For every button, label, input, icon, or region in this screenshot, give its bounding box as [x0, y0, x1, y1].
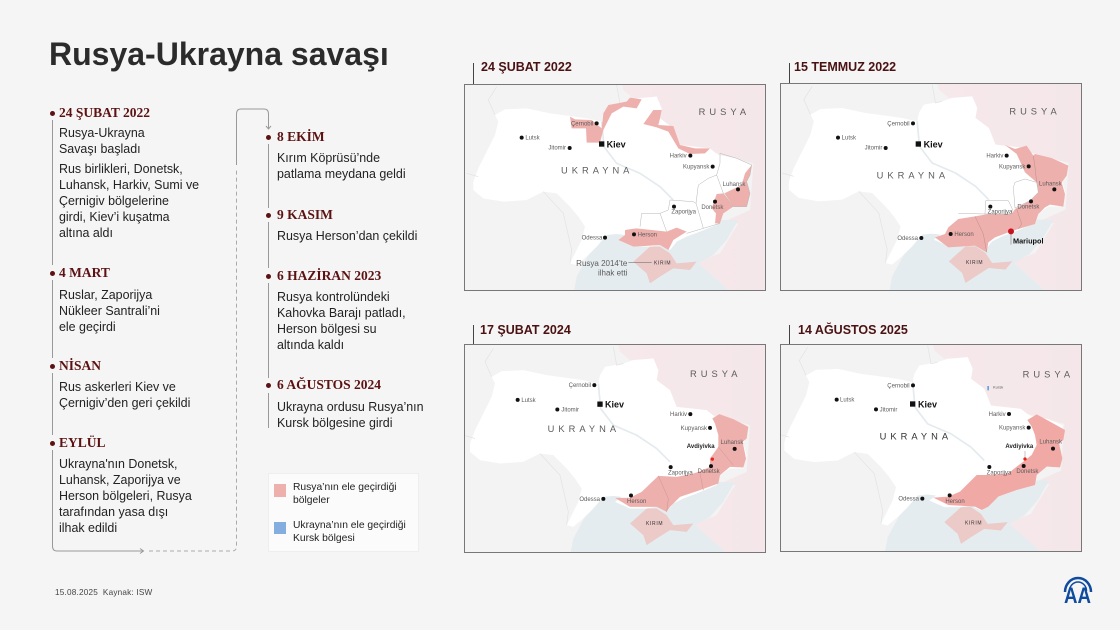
- city labels: Zaporijya: [987, 470, 1012, 476]
- city labels: Zaporijya: [671, 210, 697, 216]
- city labels: RUSYA: [690, 369, 741, 379]
- title: Rusya-Ukrayna savaşı: [49, 36, 389, 72]
- map: 24 Şubat 2022: [465, 85, 765, 290]
- city labels: Odessa: [582, 236, 603, 242]
- city labels: UKRAYNA: [548, 424, 620, 434]
- event: Eylül: EYLÜL: [59, 435, 106, 450]
- event: 6 Haziran 2023: altında kaldı: [277, 338, 344, 352]
- event: 24 Şubat 2022: Rusya-Ukrayna: [59, 126, 145, 140]
- event: Eylül: Ukrayna'nın Donetsk,: [59, 457, 178, 471]
- city labels: Avdiyivka: [1005, 444, 1034, 450]
- city labels: UKRAYNA: [561, 166, 633, 176]
- event: 9 Kasım: [266, 207, 417, 243]
- event: 4 Mart: ele geçirdi: [59, 320, 116, 334]
- city labels: Jitomir: [548, 146, 566, 152]
- event: 24 Şubat 2022: girdi, Kiev’i kuşatma: [59, 210, 170, 224]
- city labels: RUSYA: [699, 107, 750, 117]
- event: 4 Mart: Nükleer Santrali’ni: [59, 304, 160, 318]
- city labels: [835, 369, 1074, 526]
- city labels: Mariupol: [1013, 237, 1044, 246]
- city labels: Kiev: [924, 139, 943, 149]
- city labels: Luhansk: [1039, 440, 1063, 446]
- map: 17 Şubat 2024: [465, 345, 765, 552]
- event: 24 Şubat 2022: altına aldı: [59, 226, 113, 240]
- event: 8 Ekim: [266, 129, 406, 181]
- legend text: Russia: [293, 482, 397, 506]
- legend text: Ukraine: Ukrayna’nın ele geçirdiği: [293, 520, 406, 531]
- Ukrainian-held Kursk mark: [987, 386, 989, 390]
- legend text: Ukraine: [293, 520, 406, 544]
- event: Eylül: [50, 435, 192, 535]
- city labels: Kupyansk: [999, 164, 1026, 170]
- event: 6 Haziran 2023: 6 HAZİRAN 2023: [277, 268, 381, 283]
- event: Nisan: Çernigiv’den geri çekildi: [59, 396, 190, 410]
- Russian-held territory: [615, 414, 748, 512]
- map title: 24 Şubat 2022: 24 ŞUBAT 2022: [481, 60, 572, 74]
- city labels: [836, 107, 1063, 266]
- city labels: Zaporijya: [668, 471, 693, 477]
- city labels: Avdiyivka: [687, 444, 715, 450]
- city labels: Luhansk: [1039, 182, 1063, 188]
- city labels: Luhansk: [721, 440, 744, 446]
- city labels: Donetsk: [698, 469, 721, 475]
- city labels: Lutsk: [521, 398, 537, 404]
- event: Nisan: NİSAN: [59, 358, 101, 373]
- event: 8 Ekim: patlama meydana geldi: [277, 167, 406, 181]
- city labels: Kiev: [918, 399, 937, 409]
- city labels: Kupyansk: [681, 426, 708, 432]
- city labels: KIRIM: [965, 520, 982, 526]
- event: 24 Şubat 2022: Savaşı başladı: [59, 142, 141, 156]
- city labels: Kupyansk: [999, 426, 1026, 432]
- city labels: UKRAYNA: [877, 171, 949, 181]
- event: 6 Ağustos 2024: Ukrayna ordusu Rusya’nın: [277, 400, 424, 414]
- event: 8 Ekim: Kırım Köprüsü’nde: [277, 151, 380, 165]
- city labels: RUSYA: [1009, 107, 1061, 117]
- city labels: Donetsk: [1016, 469, 1039, 475]
- city labels: Jitomir: [865, 146, 882, 152]
- event: 24 Şubat 2022: 24 ŞUBAT 2022: [59, 105, 150, 120]
- city labels: Çernobil: [571, 121, 593, 127]
- city labels: Zaporijya: [988, 210, 1013, 216]
- city labels: Odessa: [898, 497, 920, 503]
- city labels: KIRIM: [966, 260, 983, 266]
- city labels: Çernobil: [569, 383, 591, 389]
- city labels: KIRIM: [654, 260, 671, 266]
- city labels: Kursk: [993, 385, 1003, 390]
- event: 24 Şubat 2022: Rus birlikleri, Donetsk,: [59, 162, 183, 176]
- event: 6 Ağustos 2024: 6 AĞUSTOS 2024: [277, 377, 381, 392]
- city labels: Lutsk: [842, 136, 857, 142]
- city labels: Kiev: [607, 139, 626, 149]
- legend text: Ukraine: Kursk bölgesi: [293, 533, 355, 544]
- legend: [268, 473, 419, 552]
- city labels: Lutsk: [525, 136, 541, 142]
- event: Eylül: tarafından yasa dışı: [59, 505, 168, 519]
- timeline connector: [52, 108, 272, 554]
- event: Eylül: ilhak edildi: [59, 521, 117, 535]
- event: Nisan: Rus askerleri Kiev ve: [59, 380, 176, 394]
- Russian-held territory: [570, 98, 752, 250]
- city labels: Donetsk: [701, 205, 724, 211]
- event: 24 Şubat 2022: Luhansk, Harkiv, Sumi ve: [59, 178, 199, 192]
- Russian-held territory: [935, 145, 1068, 252]
- city labels: Herson: [954, 232, 974, 238]
- event: Eylül: Herson bölgeleri, Rusya: [59, 489, 192, 503]
- event: 24 Şubat 2022: Çernigiv bölgelerine: [59, 194, 169, 208]
- city labels: Odessa: [579, 497, 601, 503]
- event: 9 Kasım: 9 KASIM: [277, 207, 333, 222]
- event: 4 Mart: Ruslar, Zaporijya: [59, 288, 152, 302]
- city labels: Harkiv: [670, 154, 687, 160]
- map: 15 Temmuz 2022: [781, 84, 1081, 290]
- map title: 17 Şubat 2024: 17 ŞUBAT 2024: [480, 323, 571, 337]
- city labels: Harkiv: [670, 412, 687, 418]
- city labels: Odessa: [897, 236, 919, 242]
- map: 14 Ağustos 2025: [781, 345, 1081, 551]
- city labels: Herson: [945, 499, 965, 505]
- city labels: Lutsk: [840, 398, 855, 404]
- city labels: Çernobil: [887, 121, 910, 127]
- event: 6 Haziran 2023: [266, 268, 406, 352]
- city labels: Luhansk: [723, 182, 746, 188]
- city labels: Donetsk: [1017, 205, 1040, 211]
- legend text: Russia: Rusya’nın ele geçirdiği: [293, 482, 397, 493]
- city labels: ilhak etti: [598, 269, 628, 278]
- event: 6 Haziran 2023: Herson bölgesi su: [277, 322, 377, 336]
- map title: 15 Temmuz 2022: 15 TEMMUZ 2022: [794, 60, 896, 74]
- event: Eylül: Luhansk, Zaporijya ve: [59, 473, 181, 487]
- event: 6 Ağustos 2024: Kursk bölgesine girdi: [277, 416, 392, 430]
- event: 24 Şubat 2022: [50, 105, 199, 240]
- city labels: Kiev: [605, 400, 624, 410]
- city labels: [516, 369, 744, 527]
- city labels: Herson: [638, 232, 657, 238]
- legend swatch: Ukraine: [274, 522, 286, 534]
- event: 4 Mart: 4 MART: [59, 265, 110, 280]
- city labels: Herson: [627, 499, 646, 505]
- event: 6 Ağustos 2024: [266, 377, 424, 430]
- event: 6 Haziran 2023: Kahovka Barajı patladı,: [277, 306, 406, 320]
- city labels: Rusya 2014’te: [576, 259, 628, 268]
- legend swatch: Russia: [274, 484, 286, 497]
- source line: 15.08.2025 Kaynak: ISW: [55, 588, 152, 597]
- map title: 14 Ağustos 2025: 14 AĞUSTOS 2025: [798, 323, 908, 337]
- event: 9 Kasım: Rusya Herson’dan çekildi: [277, 229, 417, 243]
- event: 8 Ekim: 8 EKİM: [277, 129, 325, 144]
- event: 6 Haziran 2023: Rusya kontrolündeki: [277, 290, 390, 304]
- city labels: Jitomir: [880, 407, 897, 413]
- city labels: UKRAYNA: [880, 432, 952, 442]
- city labels: [520, 107, 750, 278]
- city labels: Jitomir: [561, 408, 579, 414]
- event: 4 Mart: [50, 265, 160, 334]
- city labels: Kupyansk: [683, 165, 710, 171]
- city labels: Harkiv: [989, 412, 1006, 418]
- event: Nisan: [50, 358, 190, 410]
- legend text: Russia: bölgeler: [293, 495, 330, 506]
- Russian-held territory: [933, 414, 1065, 510]
- city labels: KIRIM: [646, 521, 663, 527]
- city labels: Harkiv: [986, 154, 1003, 160]
- city labels: RUSYA: [1023, 369, 1074, 379]
- city labels: Çernobil: [887, 383, 910, 389]
